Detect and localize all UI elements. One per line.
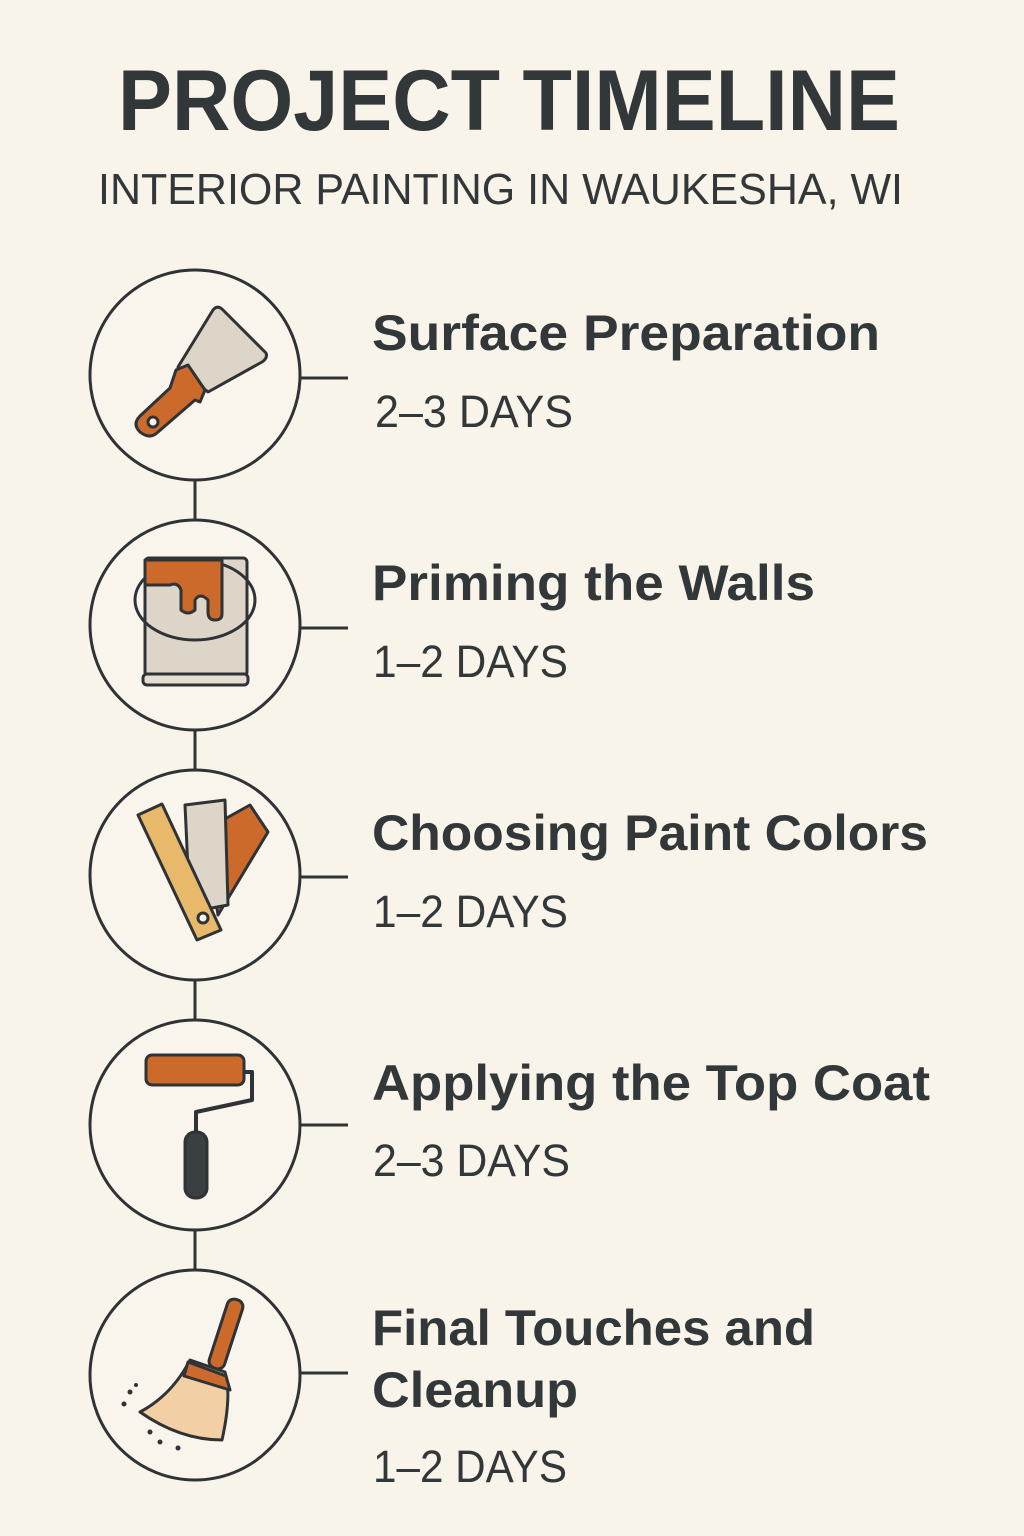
step 3: choosing colors	[90, 770, 928, 980]
icon: color swatches	[138, 800, 268, 940]
icon: paint roller	[146, 1055, 252, 1198]
title: PROJECT TIMELINE	[118, 53, 900, 149]
step 4: top coat: Applying the Top Coat	[372, 1055, 930, 1111]
step 4: top coat	[90, 1020, 930, 1230]
icon: paint can	[135, 558, 255, 685]
timeline connectors	[194, 480, 196, 1270]
step 1: surface preparation	[90, 270, 880, 480]
subtitle: INTERIOR PAINTING IN WAUKESHA, WI	[98, 165, 903, 214]
step 5: cleanup: 1–2 DAYS	[373, 1441, 567, 1492]
step 1: surface preparation: 2–3 DAYS	[375, 386, 573, 437]
step 5: cleanup	[90, 1270, 815, 1492]
step 3: choosing colors: 1–2 DAYS	[373, 886, 568, 937]
step 5: cleanup: Cleanup	[372, 1362, 578, 1418]
icon: broom	[140, 1297, 245, 1440]
step 2: priming: 1–2 DAYS	[373, 636, 568, 687]
text: Surface Preparation	[372, 305, 880, 361]
step 2: priming: Priming the Walls	[372, 555, 815, 611]
step 3: choosing colors: Choosing Paint Colors	[372, 805, 928, 861]
step 5: cleanup: Final Touches and	[372, 1300, 815, 1356]
step 2: priming	[90, 520, 815, 730]
icon: putty knife	[136, 307, 266, 436]
step 4: top coat: 2–3 DAYS	[373, 1135, 570, 1186]
